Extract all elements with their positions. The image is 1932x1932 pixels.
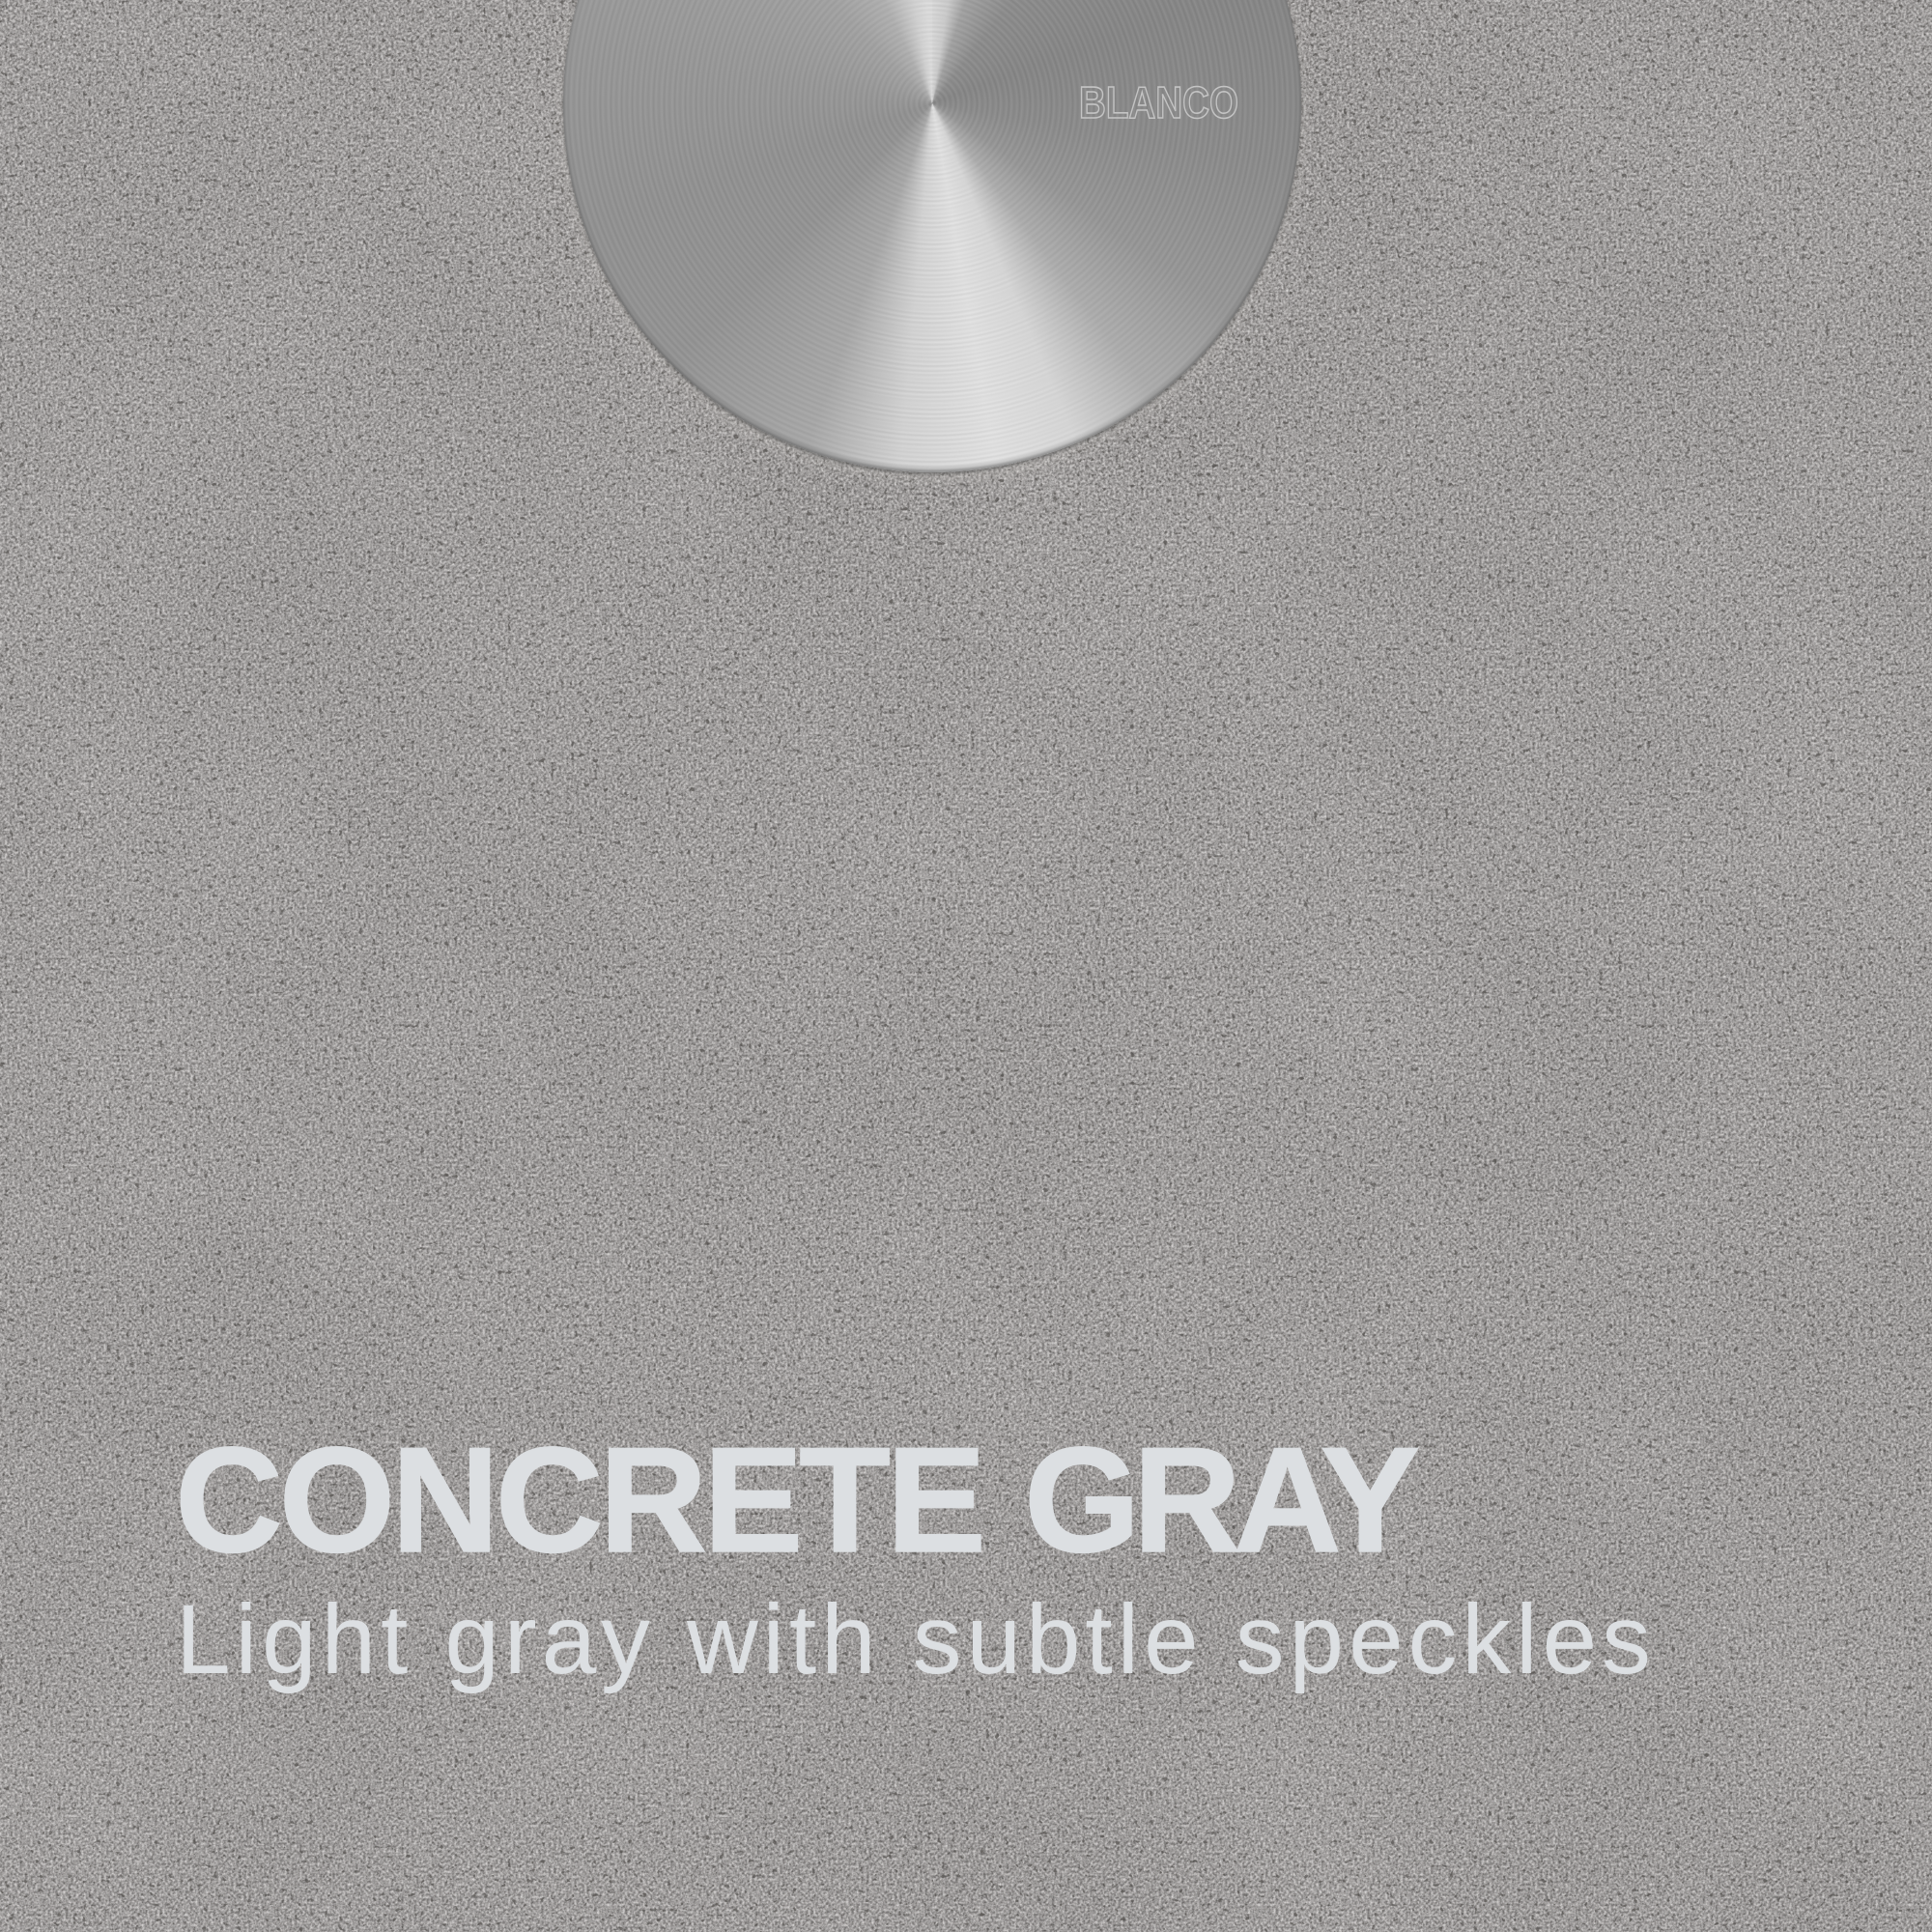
heading: CONCRETE	[175, 1416, 986, 1583]
icon: brushed steel drain disk	[563, 0, 1301, 472]
subtitle: Light gray with subtle speckles	[176, 1584, 1651, 1694]
logo: BLANCO embossed: BLANCO	[1079, 77, 1238, 128]
heading	[175, 1416, 1420, 1583]
heading: GRAY	[1024, 1416, 1420, 1583]
